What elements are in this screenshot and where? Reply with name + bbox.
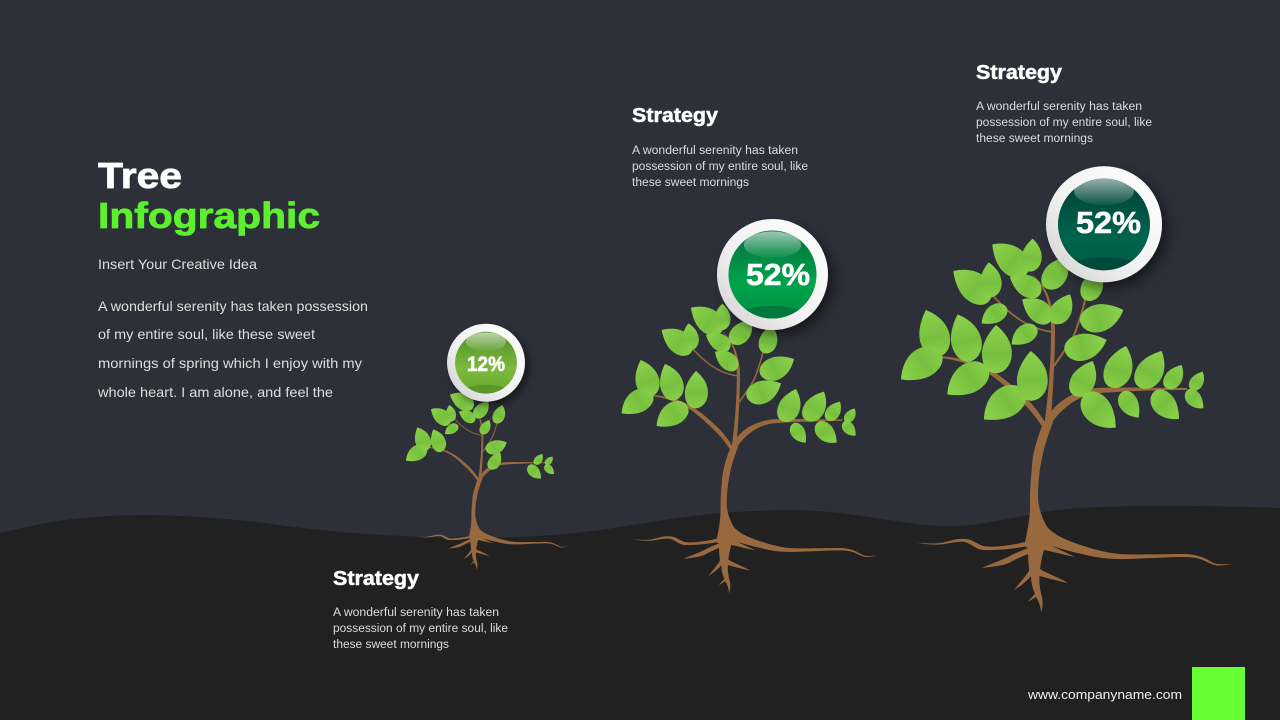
large tree leaves — [892, 233, 1209, 438]
text block: medium tree strategy: Strategy — [632, 105, 719, 127]
text block: medium tree strategy: possession of my entire soul, like — [632, 161, 808, 173]
text block: medium tree strategy: these sweet mornings — [632, 177, 749, 189]
badge: 52% large — [1046, 166, 1162, 282]
text block: small tree strategy: Strategy — [333, 568, 420, 590]
medium tree trunk and roots — [633, 330, 877, 594]
text block: large tree strategy: these sweet mornings — [976, 133, 1093, 145]
text block: small tree strategy: A wonderful serenity has taken — [333, 607, 499, 619]
small tree leaves — [402, 387, 557, 482]
text block: medium tree strategy — [632, 105, 808, 189]
badge: 52% large: 52% — [1076, 205, 1141, 240]
text block: small tree strategy: possession of my entire soul, like — [333, 623, 508, 635]
text block: large tree strategy: possession of my entire soul, like — [976, 117, 1152, 129]
title — [98, 155, 320, 236]
ground — [0, 506, 1280, 720]
text block: large tree strategy: Strategy — [976, 62, 1063, 84]
medium tree — [615, 298, 877, 594]
website url: www.companyname.com — [1027, 687, 1182, 702]
green square accent — [1192, 667, 1245, 720]
text block: medium tree strategy: A wonderful serenity has taken — [632, 145, 798, 157]
small tree — [402, 387, 568, 570]
badge: 12%: 12% — [467, 353, 505, 376]
intro paragraph: of my entire soul, like these sweet — [98, 326, 315, 342]
badge: 52% medium — [717, 219, 828, 330]
large tree trunk and roots — [917, 272, 1232, 613]
title: Tree — [98, 155, 182, 196]
text block: small tree strategy: these sweet mornings — [333, 639, 449, 651]
subtitle: Insert Your Creative Idea — [98, 256, 257, 272]
intro paragraph: mornings of spring which I enjoy with my — [98, 355, 362, 371]
intro paragraph — [97, 298, 368, 400]
badge: 52% medium: 52% — [746, 257, 810, 292]
small tree trunk and roots — [417, 407, 568, 570]
text block: small tree strategy — [333, 568, 508, 651]
title: Infographic — [98, 195, 320, 236]
large tree — [892, 233, 1232, 613]
intro paragraph: A wonderful serenity has taken possession — [98, 298, 368, 314]
text block: large tree strategy — [976, 62, 1152, 145]
intro paragraph: whole heart. I am alone, and feel the — [97, 384, 333, 400]
text block: large tree strategy: A wonderful serenity has taken — [976, 101, 1142, 113]
badge: 12% — [447, 324, 525, 402]
medium tree leaves — [615, 298, 860, 449]
